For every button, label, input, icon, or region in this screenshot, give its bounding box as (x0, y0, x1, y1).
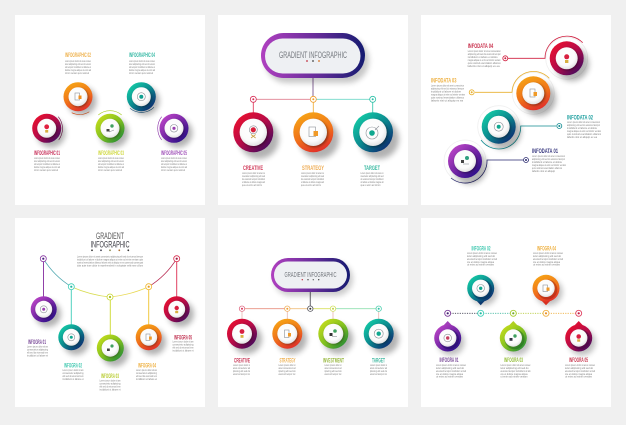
intro text: incididunt ut labore et dolore magna aliqua ut enim ad minim veniam quis (77, 258, 144, 262)
circle 04 orange (136, 324, 166, 355)
text: strategy: amet consectetur ad (278, 367, 296, 370)
text: creative: amet consectetur ad (233, 367, 250, 370)
panel: three-branch hierarchy (218, 15, 408, 205)
text block 03: dolore magna aliqua ut enim ad (98, 166, 124, 169)
text block 03: tetur adipiscing elit sed do eiusm (98, 160, 124, 163)
circle 01 red (32, 114, 66, 148)
text: strategy: ut labore et dolore magna ali (301, 181, 324, 184)
text 03: elit sed do eiusmod tem (100, 386, 120, 388)
text: strategy: Lorem ipsum dolor sit amet co (301, 172, 324, 175)
text block 05: Lorem ipsum dolor sit amet consec (161, 157, 187, 160)
circle: creative (233, 112, 279, 159)
title: INFOGRAPHIC (90, 240, 130, 250)
circle 04 teal (127, 82, 160, 116)
text 05 (172, 340, 194, 352)
label: infodata 03: INFODATA 03 (431, 78, 457, 84)
label 01: INFOGRA 01 (28, 340, 46, 346)
text: investment: eiusmod tempor inc (324, 373, 342, 376)
text: infodata 03: magna aliqua ut enim ad minim veniam (431, 94, 465, 96)
text: infodata 04: incididunt ut labore et dolore (468, 56, 498, 59)
text block 05: tetur adipiscing elit sed do eiusm (161, 160, 187, 163)
circle 05 red (164, 296, 194, 327)
connector lines (242, 292, 379, 320)
text 03: tetur adipiscing elit sed do (500, 367, 529, 370)
label: strategy: STRATEGY (302, 166, 324, 172)
pin green (500, 321, 530, 356)
text block 04: Lorem ipsum dolor sit amet consec (129, 60, 155, 63)
text: infodata 02: Lorem ipsum dolor sit amet consectetur (567, 121, 600, 124)
text 05: tetur adipiscing elit sed do (565, 367, 594, 370)
text 05: incididunt ut labore et (172, 350, 194, 352)
label: target: TARGET (364, 166, 380, 172)
text: creative: eiusmod tempor inc (233, 373, 251, 376)
text 04: consectetur adipiscing (136, 372, 158, 375)
text block 04 (129, 60, 155, 75)
text: infodata 03: incididunt ut labore et dolore (431, 90, 462, 94)
text: strategy: eiusmod tempor inc (278, 373, 296, 376)
text: creative: ut labore et dolore magna ali (242, 181, 265, 184)
label 01: INFOGRA 01 (440, 358, 459, 364)
faint halos (444, 37, 588, 182)
text 02: incididunt ut labore et (62, 378, 84, 381)
text: infodata 02: magna aliqua ut enim ad minim veniam (567, 130, 601, 133)
text block 02: Lorem ipsum dolor sit amet consec (65, 60, 91, 63)
text 03: Lorem ipsum dolor sit am (100, 380, 120, 382)
circle: strategy (293, 112, 339, 159)
text 01: incididunt ut labore et (27, 354, 48, 358)
connector nodes (239, 306, 381, 311)
intro text: nostrud exercitation ullamco laboris nisi ut aliquip ex ea commodo consequat (77, 262, 143, 264)
pin red (565, 321, 596, 356)
circle 03 green (96, 114, 128, 148)
label: infographic 03: INFOGRAPHIC 03 (98, 151, 124, 157)
text: target: eiusmod tempor inc (370, 373, 388, 376)
circle: creative (227, 319, 262, 354)
text 04: ore et dolore magna aliqua (533, 261, 561, 264)
circle 02 teal (482, 110, 521, 149)
text: strategy (301, 172, 324, 187)
text: investment: amet consectetur ad (324, 367, 342, 370)
text: infodata 02: quis nostrud exercitation ullamco (567, 133, 602, 136)
label: infodata 04: INFODATA 04 (468, 44, 494, 50)
text: target (370, 364, 388, 376)
text: investment: ipiscing elit sed do (324, 370, 342, 373)
intro text: Lorem ipsum dolor sit amet consectetur adipiscing elit sed do eiusmod tempor (77, 256, 143, 258)
text: investment (324, 364, 342, 376)
text block 03: minim veniam quis nostrud (98, 169, 122, 172)
text: infodata 01: laboris nisi ut aliquip (532, 170, 556, 173)
label: infographic 02: INFOGRAPHIC 02 (65, 53, 91, 59)
text: infodata 03: quis nostrud exercitation ullamco (431, 96, 465, 100)
circle: target (364, 319, 399, 354)
connector nodes (250, 96, 376, 102)
text 02: Lorem ipsum dolor sit amet consec (467, 252, 498, 255)
text block 03 (98, 157, 124, 172)
text 04: tetur adipiscing elit sed do (533, 255, 562, 258)
text 03: consectetur adipiscing (100, 382, 121, 386)
text 01: ore et dolore magna aliqua (436, 373, 464, 376)
text 02 (62, 369, 84, 381)
label 04: INFOGRA 04 (537, 246, 556, 252)
text 01: elit sed do eiusmod tem (27, 352, 48, 354)
text block 01: minim veniam quis nostrud (34, 169, 58, 172)
text: infodata 02: adipiscing elit sed do eiusmod tempor (567, 124, 600, 127)
text 01: Lorem ipsum dolor sit amet consec (436, 364, 467, 367)
text 04: incididunt ut labore et (136, 378, 157, 381)
text: infodata 04: laboris nisi ut aliquip ex ea (468, 65, 500, 68)
text: infodata 01: adipiscing elit sed do eiusmod tempor (532, 158, 565, 161)
circle 03 green (97, 334, 128, 366)
panel: four-branch hierarchy (218, 218, 408, 407)
circle 04 red (550, 41, 589, 81)
label: infographic 01: INFOGRAPHIC 01 (34, 151, 60, 157)
label: target: TARGET (372, 359, 385, 365)
pin teal (467, 275, 498, 306)
text 03 (500, 364, 531, 378)
connector nodes (469, 56, 562, 162)
title pill (261, 33, 369, 83)
text block 02: od tempor incididunt ut labore et (65, 66, 91, 69)
title pill: GRADIENT INFOGRAPHIC (279, 50, 347, 60)
text block 02: minim veniam quis nostrud (65, 72, 89, 75)
connector lines with arcs (451, 36, 583, 183)
text: infodata 03: Lorem ipsum dolor sit amet consectetur (431, 84, 464, 88)
text: target (360, 172, 384, 187)
text: infodata 03: adipiscing elit sed do eiusmod tempor (431, 88, 464, 90)
arcs around circles (58, 107, 162, 140)
text block 03: od tempor incididunt ut labore et (98, 163, 124, 166)
text 05: ore et dolore magna aliqua (565, 373, 593, 376)
circle 03 orange (516, 76, 556, 116)
label 04: INFOGRA 04 (138, 364, 156, 370)
pin purple (434, 321, 464, 356)
text 03: incididunt ut labore et (100, 388, 121, 392)
text 05: Lorem ipsum dolor sit amet consec (565, 364, 596, 367)
text: strategy (278, 364, 296, 376)
text 01: consectetur adipiscing (27, 348, 49, 352)
text 02: elit sed do eiusmod tem (62, 375, 84, 378)
text 05: ut enim ad minim veniam (565, 376, 592, 378)
text block 05 (161, 157, 187, 172)
circle 02 teal (58, 324, 89, 355)
title dots (91, 249, 129, 251)
text: creative: do eiusmod tempor incididunt (242, 178, 265, 181)
text block 01: dolore magna aliqua ut enim ad (34, 166, 60, 169)
text: infodata 04: quis nostrud exercitation ullamco (468, 62, 501, 65)
text 03: eiusmod tempor incididunt ut lab (500, 370, 531, 373)
label 02: INFOGRA 02 (472, 246, 491, 252)
text: infodata 02: incididunt ut labore et dolore (567, 127, 598, 130)
circle: target (353, 112, 399, 159)
text 04: elit sed do eiusmod tem (136, 375, 157, 378)
circle: investment (318, 319, 353, 354)
text 04: eiusmod tempor incididunt ut lab (533, 258, 564, 261)
circle: strategy (272, 319, 307, 354)
text: infodata 01 (532, 155, 566, 173)
text: infodata 03: laboris nisi ut aliquip ex ea (431, 100, 464, 102)
text 01: ut enim ad minim veniam (436, 376, 463, 378)
text 01: Lorem ipsum dolor sit am (27, 346, 48, 348)
intro text (77, 256, 144, 268)
text: investment: Lorem ipsum dolor si (324, 364, 342, 367)
text: creative: qua ut enim ad minim (242, 184, 262, 187)
text block 01 (34, 157, 60, 172)
title: GRADIENT (96, 231, 124, 241)
text 04: ut enim ad minim veniam (533, 264, 560, 266)
text: strategy: qua ut enim ad minim (301, 184, 321, 187)
text 05 (565, 364, 596, 378)
circle 01 purple (448, 144, 487, 184)
text: target: ipiscing elit sed do (370, 370, 387, 373)
text 01: eiusmod tempor incididunt ut lab (436, 370, 467, 373)
panel: five circles (15, 15, 205, 205)
label: investment: INVESTMENT (323, 359, 344, 365)
text 05: Lorem ipsum dolor sit am (172, 340, 194, 344)
text: strategy: Lorem ipsum dolor si (278, 364, 296, 367)
text 02: ore et dolore magna aliqua (467, 261, 495, 264)
text 02: ut enim ad minim veniam (467, 264, 494, 266)
label 05: INFOGRA 05 (174, 335, 192, 341)
panel: diagonal infodata (421, 15, 611, 205)
text: infodata 01: Lorem ipsum dolor sit amet consectetur (532, 155, 565, 158)
label: infodata 02: INFODATA 02 (567, 116, 593, 122)
text: target: Lorem ipsum dolor sit amet co (360, 172, 384, 175)
circle 02 orange (64, 82, 96, 116)
dotted timeline (448, 312, 579, 314)
curve nodes (40, 256, 180, 300)
text: infodata 04: magna aliqua ut enim ad minim veniam (468, 59, 501, 62)
text block 01: Lorem ipsum dolor sit amet consec (34, 157, 60, 160)
text: infodata 01: magna aliqua ut enim ad minim veniam (532, 164, 566, 167)
text 02 (467, 252, 498, 266)
text 03: ore et dolore magna aliqua (500, 373, 528, 376)
text block 04: minim veniam quis nostrud (129, 72, 153, 75)
label: creative: CREATIVE (234, 359, 250, 365)
text: strategy: do eiusmod tempor incididunt (301, 178, 324, 181)
label: infodata 01: INFODATA 01 (532, 149, 558, 155)
text: target: Lorem ipsum dolor si (370, 364, 387, 367)
text block 03: Lorem ipsum dolor sit amet consec (98, 157, 124, 160)
text 02: tetur adipiscing elit sed do (467, 255, 496, 258)
text: infodata 04: adipiscing elit sed do eiusmod tempor (468, 53, 501, 56)
text: target: amet consectetur ad (370, 367, 387, 370)
label: creative: CREATIVE (243, 166, 263, 172)
text: creative: nsectetur adipiscing elit sed (242, 175, 265, 178)
label 03: INFOGRA 03 (101, 374, 119, 380)
text: target: do eiusmod tempor incididunt (360, 178, 384, 181)
text 05: consectetur adipiscing (172, 344, 194, 346)
text block 01: tetur adipiscing elit sed do eiusm (34, 160, 60, 163)
text block 01: od tempor incididunt ut labore et (34, 163, 60, 166)
text 03: ut enim ad minim veniam (500, 376, 528, 378)
text: target: nsectetur adipiscing elit sed (360, 175, 384, 178)
circle 05 purple (160, 114, 192, 148)
title pill: GRADIENT INFOGRAPHIC (284, 272, 336, 279)
text block 04: od tempor incididunt ut labore et (129, 66, 155, 69)
text 01 (436, 364, 467, 378)
text 02: eiusmod tempor incididunt ut lab (467, 258, 498, 261)
text: creative: Lorem ipsum dolor si (233, 364, 250, 367)
text 03 (100, 380, 121, 392)
label: infographic 04: INFOGRAPHIC 04 (129, 53, 155, 59)
text: strategy: ipiscing elit sed do (278, 370, 296, 373)
text 04: Lorem ipsum dolor sit am (136, 369, 157, 372)
text: infodata 02 (567, 121, 602, 139)
text block 02 (65, 60, 91, 75)
text: strategy: nsectetur adipiscing elit sed (301, 175, 324, 178)
text block 05: minim veniam quis nostrud (161, 169, 185, 172)
timeline nodes (445, 310, 582, 316)
text 02: consectetur adipiscing (62, 372, 84, 375)
text: target: ut labore et dolore magna ali (360, 181, 384, 184)
pin orange (532, 275, 562, 306)
text block 02: dolore magna aliqua ut enim ad (65, 69, 91, 72)
label 05: INFOGRA 05 (569, 358, 588, 364)
text block 05: od tempor incididunt ut labore et (161, 163, 187, 166)
text block 04: dolore magna aliqua ut enim ad (129, 69, 155, 72)
text block 05: dolore magna aliqua ut enim ad (161, 166, 187, 169)
title pill (271, 258, 353, 296)
text: creative (233, 364, 251, 376)
text block 02: tetur adipiscing elit sed do eiusm (65, 63, 91, 66)
text: infodata 04 (468, 50, 501, 68)
text: creative (242, 172, 265, 187)
text: creative: ipiscing elit sed do (233, 370, 250, 373)
text block 04: tetur adipiscing elit sed do eiusm (129, 63, 155, 66)
intro text: duis aute irure dolor in reprehenderit in voluptate velit esse cillum (77, 264, 143, 268)
text: infodata 01: incididunt ut labore et dolore (532, 161, 563, 164)
text: target: qua ut enim ad minim (360, 184, 380, 187)
text: creative: Lorem ipsum dolor sit amet co (242, 172, 265, 175)
text 01 (27, 346, 49, 358)
panel: timeline pins (421, 218, 611, 407)
text: infodata 04: Lorem ipsum dolor sit amet consectetur (468, 50, 501, 53)
text 05: elit sed do eiusmod tem (172, 346, 194, 350)
text 01: tetur adipiscing elit sed do (436, 367, 465, 370)
text 03: Lorem ipsum dolor sit amet consec (500, 364, 531, 367)
connector lines (253, 78, 373, 115)
label: infographic 05: INFOGRAPHIC 05 (161, 151, 187, 157)
text: infodata 01: quis nostrud exercitation ullamco (532, 167, 562, 170)
label 02: INFOGRA 02 (64, 364, 82, 370)
title (90, 231, 130, 250)
text 04 (136, 369, 158, 381)
text 02: Lorem ipsum dolor sit am (62, 369, 84, 372)
text: infodata 02: laboris nisi ut aliquip ex ea (567, 136, 598, 139)
text: infodata 03 (431, 84, 465, 102)
panel: four-branch hierarchy: STRATEGY (280, 359, 296, 365)
circle 01 purple (31, 296, 61, 327)
text 05: eiusmod tempor incididunt ut lab (565, 370, 596, 373)
text 04 (533, 252, 564, 266)
label 03: INFOGRA 03 (504, 358, 523, 364)
curve segments and stems (43, 259, 177, 338)
panel: hanging curve (15, 218, 205, 407)
text 04: Lorem ipsum dolor sit amet consec (533, 252, 564, 255)
